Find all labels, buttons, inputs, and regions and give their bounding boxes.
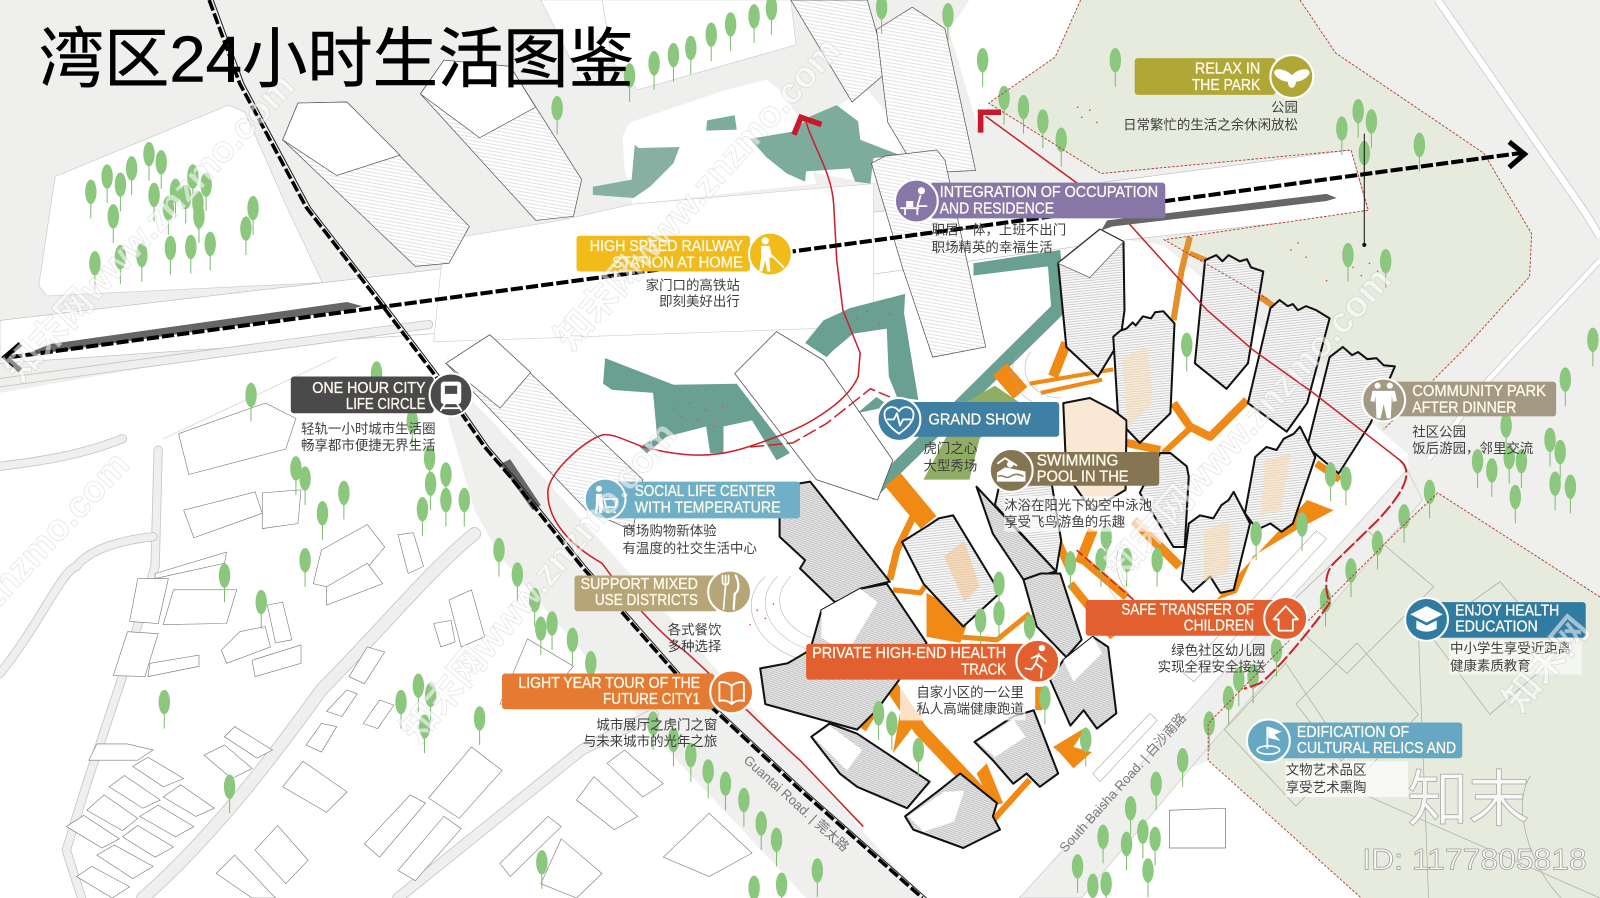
callout: enjoy health education bbox=[1405, 598, 1586, 675]
callout: swimming pool in the bbox=[990, 449, 1159, 532]
callout: social life center with temperature: SOCIAL LIFE CENTER bbox=[635, 483, 776, 500]
callout: swimming pool in the: 沐浴在阳光下的空中泳池 bbox=[1004, 498, 1152, 513]
callout: light year tour of the future city: 与未来城市的光年之旅 bbox=[583, 733, 717, 749]
contour landscape bbox=[751, 352, 1158, 663]
callout: edification of cultural relics and bbox=[1247, 719, 1462, 797]
park boundaries: dashed red bbox=[989, 0, 1600, 898]
icon: heart with pulse bbox=[884, 407, 913, 434]
road label: Guantai Road: Guantai Road. | 莞太路 bbox=[741, 752, 852, 855]
icon: fork and knife bbox=[722, 576, 738, 609]
callout: high speed railway station at home: 家门口的高铁站 bbox=[646, 277, 740, 293]
callout: high speed railway station at home: 即刻美好出行 bbox=[659, 294, 740, 309]
callout: safe transfer of children: SAFE TRANSFER OF bbox=[1121, 601, 1254, 618]
school campus linework bbox=[1224, 531, 1600, 898]
callout: support mixed use districts bbox=[574, 570, 751, 654]
callout: social life center with temperature: 有温度的社交生活中心 bbox=[622, 540, 757, 556]
callout: light year tour of the future city: FUTURE CITY1 bbox=[603, 691, 700, 708]
icon: runner bbox=[1026, 645, 1046, 678]
callout: enjoy health education: ENJOY HEALTH bbox=[1455, 602, 1559, 619]
callout: edification of cultural relics and: 文物艺术品区 bbox=[1286, 763, 1366, 778]
callout: relax in the park bbox=[1123, 55, 1313, 133]
watermarks: 知末网 bbox=[1495, 609, 1597, 719]
icon: couple bbox=[1370, 383, 1397, 418]
callout: light year tour of the future city: 城市展厅之虎门之窗 bbox=[596, 717, 717, 733]
callout: private high-end health track: 私人高端健康跑道 bbox=[916, 700, 1024, 716]
route: red circulation lines bbox=[548, 116, 1406, 827]
callout: relax in the park: 公园 bbox=[1271, 100, 1298, 115]
callout: swimming pool in the: 享受飞鸟游鱼的乐趣 bbox=[1004, 514, 1125, 530]
context towers: north and west of station bbox=[283, 0, 986, 531]
callout: grand show: 虎门之心 bbox=[923, 441, 977, 456]
train: metro silhouette bbox=[500, 459, 541, 510]
callout: community park after dinner: 社区公园 bbox=[1412, 425, 1466, 440]
context buildings: lower-left blocks bbox=[66, 403, 752, 898]
arrow: red route heads bbox=[794, 112, 1001, 135]
icon: person at desk bbox=[901, 187, 927, 214]
callout: safe transfer of children: CHILDREN bbox=[1184, 618, 1254, 635]
callout: edification of cultural relics and: 享受艺术熏陶 bbox=[1286, 779, 1366, 795]
callout: support mixed use districts: 各式餐饮 bbox=[668, 623, 722, 638]
rail line: dashed black with arrows bbox=[5, 142, 1524, 370]
callout: social life center with temperature: 商场购物新体验 bbox=[622, 524, 717, 539]
residential towers bbox=[760, 230, 1395, 848]
callout: safe transfer of children: 绿色社区幼儿园 bbox=[1171, 642, 1265, 658]
callout: relax in the park: RELAX IN bbox=[1195, 60, 1260, 77]
metro line: dashed black bbox=[209, 0, 927, 898]
orange walkways bbox=[863, 237, 1340, 820]
callout: high speed railway station at home bbox=[577, 233, 792, 309]
callout: relax in the park: 日常繁忙的生活之余休闲放松 bbox=[1123, 117, 1298, 133]
callout: private high-end health track: TRACK bbox=[961, 662, 1007, 679]
callout: one hour city life circle: ONE HOUR CITY bbox=[312, 380, 426, 397]
watermark: image id: ID: 1177805818 bbox=[1362, 843, 1587, 876]
teal plazas bbox=[593, 105, 1066, 500]
icon: flag bbox=[1257, 727, 1282, 754]
watermarks: 知末网www.znzmo.com bbox=[1098, 259, 1399, 587]
callout: enjoy health education: 中小学生享受近距离 bbox=[1450, 640, 1571, 656]
callout: private high-end health track: PRIVATE HIGH-END HEALTH bbox=[812, 645, 1006, 662]
icon: swimmer in waves bbox=[997, 458, 1026, 482]
callout: community park after dinner: AFTER DINNER bbox=[1412, 399, 1516, 416]
callout: integration of occupation and residence: 职场精英的幸福生活 bbox=[932, 239, 1053, 255]
train: west rail silhouette bbox=[31, 302, 362, 355]
roads: lower-left network bbox=[0, 325, 653, 898]
icon: traveller with suitcase bbox=[759, 237, 784, 271]
callout: support mixed use districts: SUPPORT MIXED bbox=[581, 576, 698, 593]
watermarks: 知末网www.znzmo.com bbox=[393, 414, 685, 750]
callout: support mixed use districts: USE DISTRICTS bbox=[595, 592, 698, 609]
callout: social life center with temperature: WITH TEMPERATURE bbox=[635, 499, 781, 516]
callout: integration of occupation and residence: INTEGRATION OF OCCUPATION bbox=[940, 184, 1158, 201]
title: 湾区24小时生活图鉴 bbox=[39, 23, 634, 96]
icon: leaves bbox=[1272, 67, 1311, 88]
callout: community park after dinner bbox=[1362, 379, 1556, 456]
callout: relax in the park: THE PARK bbox=[1192, 77, 1261, 94]
callout: community park after dinner: 饭后游园，邻里交流 bbox=[1412, 440, 1533, 456]
callout: grand show: 大型秀场 bbox=[923, 458, 977, 473]
callout: safe transfer of children bbox=[1086, 597, 1307, 674]
green court bbox=[923, 386, 1020, 480]
callout: one hour city life circle: 轻轨一小时城市生活圈 bbox=[301, 421, 436, 437]
icon: house bbox=[1273, 606, 1298, 631]
callout: support mixed use districts: 多种选择 bbox=[668, 638, 722, 654]
watermark: brand: 知末 bbox=[1407, 765, 1530, 833]
callout: private high-end health track bbox=[806, 640, 1059, 720]
callout: edification of cultural relics and: EDIFICATION OF bbox=[1297, 724, 1409, 741]
watermarks: 知末网www.znzmo.com bbox=[547, 29, 848, 357]
callout: one hour city life circle: 畅享都市便捷无界生活 bbox=[301, 437, 436, 453]
callout: integration of occupation and residence: AND RESIDENCE bbox=[940, 200, 1054, 217]
callout: grand show bbox=[878, 398, 1059, 473]
callout: one hour city life circle bbox=[291, 373, 472, 453]
callout: high speed railway station at home: HIGH SPEED RAILWAY bbox=[590, 238, 743, 255]
callout: community park after dinner: COMMUNITY PARK bbox=[1412, 383, 1546, 400]
callout: swimming pool in the: POOL IN THE bbox=[1037, 469, 1129, 486]
scattered flowers bbox=[673, 107, 1378, 625]
pole marker bbox=[1362, 134, 1366, 247]
callout: social life center with temperature bbox=[585, 479, 800, 556]
icon: graduation cap bbox=[1410, 606, 1443, 632]
callout: grand show: GRAND SHOW bbox=[929, 412, 1031, 429]
callout: light year tour of the future city bbox=[502, 670, 753, 749]
callout: one hour city life circle: LIFE CIRCLE bbox=[346, 396, 426, 413]
watermarks: 知末网www.znzmo.com bbox=[0, 65, 302, 389]
callout: high speed railway station at home: STATION AT HOME bbox=[612, 254, 743, 271]
callout: light year tour of the future city: LIGHT YEAR TOUR OF THE bbox=[518, 675, 700, 692]
callout: enjoy health education: 健康素质教育 bbox=[1450, 657, 1531, 673]
icon: metro train bbox=[441, 382, 461, 410]
icon: shopper with cart bbox=[595, 486, 617, 513]
callout: private high-end health track: 自家小区的一公里 bbox=[916, 684, 1024, 700]
icon: open book bbox=[719, 682, 744, 704]
callout: swimming pool in the: SWIMMING bbox=[1037, 452, 1118, 469]
callout: safe transfer of children: 实现全程安全接送 bbox=[1158, 658, 1266, 674]
callout: integration of occupation and residence: 职居一体，上班不出门 bbox=[932, 223, 1066, 238]
callout: enjoy health education: EDUCATION bbox=[1455, 619, 1538, 636]
train: east rail silhouette bbox=[1101, 194, 1337, 231]
callout: edification of cultural relics and: CULTURAL RELICS AND bbox=[1297, 740, 1456, 757]
callout: integration of occupation and residence bbox=[895, 180, 1165, 255]
road label: South Baisha Road: South Baisha Road. | 白沙南路 bbox=[1056, 710, 1189, 855]
